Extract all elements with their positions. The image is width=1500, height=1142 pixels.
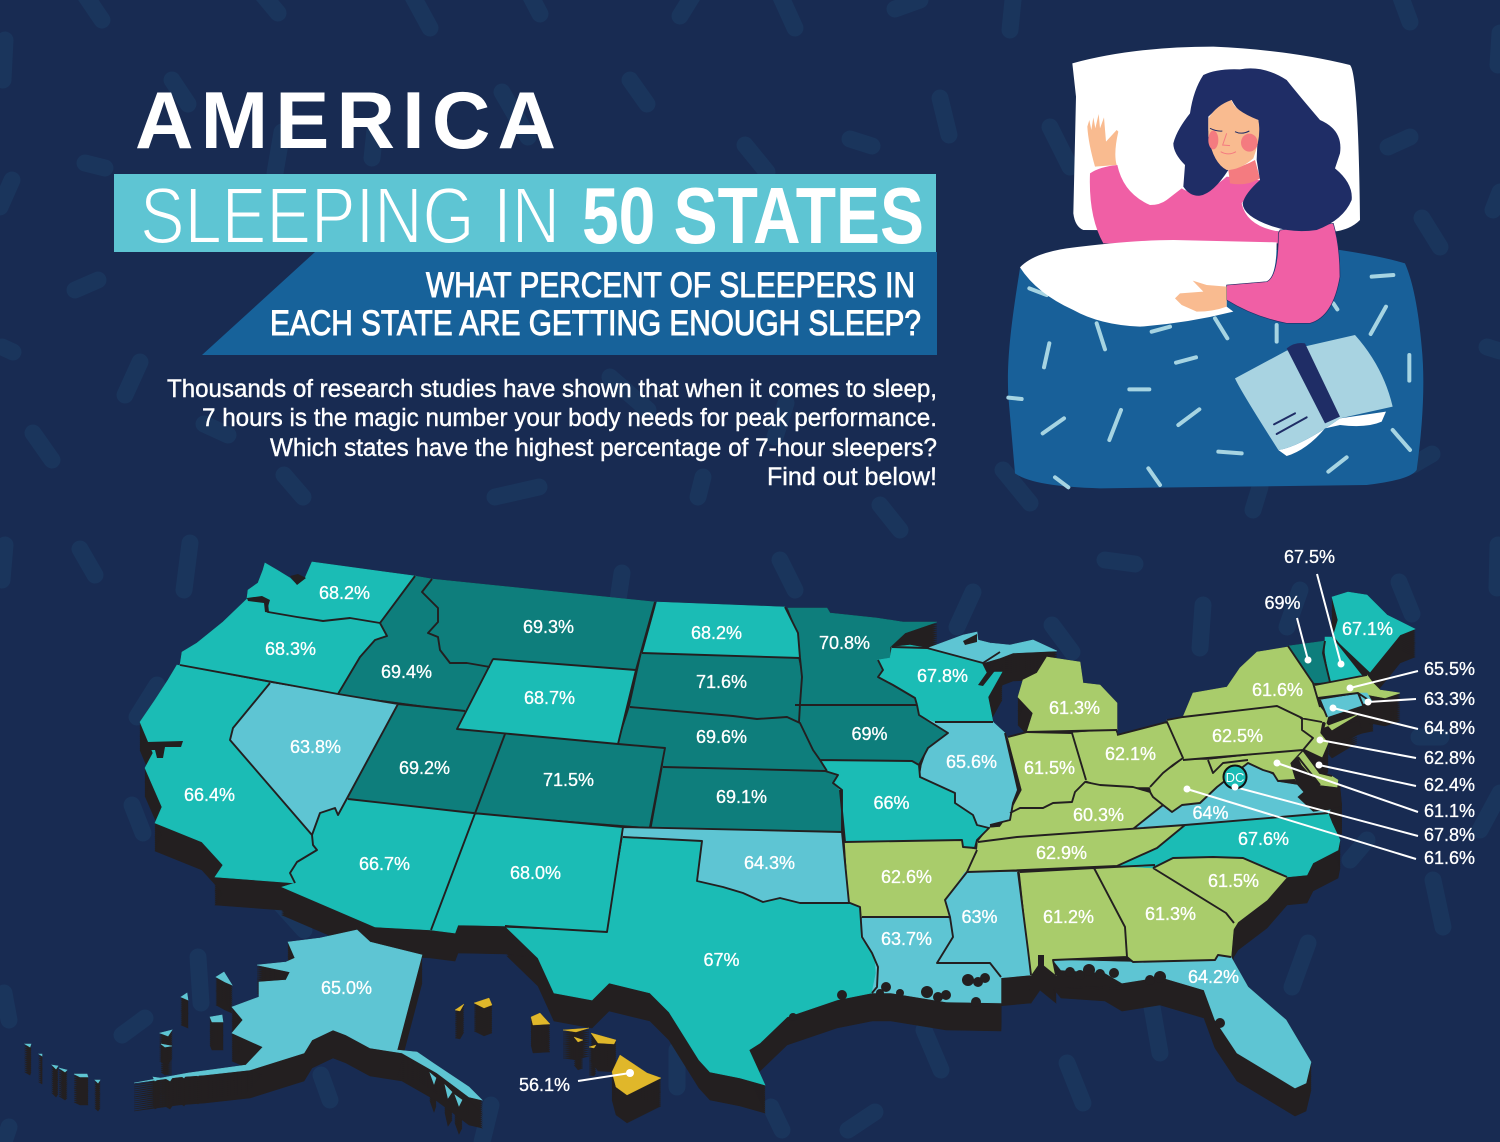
state: Ohio xyxy=(1072,722,1183,787)
blanket xyxy=(1008,250,1423,488)
state percentage labels: 61.3% xyxy=(1145,904,1196,924)
question line 2: EACH STATE ARE GETTING ENOUGH SLEEP? xyxy=(270,304,921,343)
state percentage labels: 62.5% xyxy=(1212,726,1263,746)
state: Idaho xyxy=(338,576,490,711)
state percentage labels: 61.3% xyxy=(1049,698,1100,718)
callout labels: 69% xyxy=(1264,593,1301,613)
state: Louisiana xyxy=(861,917,1001,1003)
state: North Dakota xyxy=(643,602,800,658)
state percentage labels xyxy=(184,583,1393,998)
book xyxy=(1235,335,1393,456)
state: Nebraska xyxy=(618,707,827,771)
state percentage labels: 69.3% xyxy=(523,617,574,637)
state percentage labels: 63.7% xyxy=(881,929,932,949)
state percentage labels: 67.6% xyxy=(1238,829,1289,849)
state percentage labels: 62.9% xyxy=(1036,843,1087,863)
banner: Sleeping in 50 states xyxy=(114,171,936,260)
neck xyxy=(1228,160,1260,184)
state percentage labels: 71.5% xyxy=(543,770,594,790)
state: South Carolina xyxy=(1153,857,1287,930)
state percentage labels: 68.7% xyxy=(524,688,575,708)
leader dots xyxy=(626,656,1372,1077)
state percentage labels: 61.6% xyxy=(1252,680,1303,700)
state: Massachusetts xyxy=(1315,675,1400,698)
intro text: Find out below! xyxy=(767,463,937,491)
state: Michigan lower peninsula xyxy=(1018,657,1117,732)
state percentage labels: 66.4% xyxy=(184,785,235,805)
state: Tennessee xyxy=(967,825,1185,872)
state percentage labels: 67.8% xyxy=(917,666,968,686)
callout labels: 61.1% xyxy=(1424,801,1475,821)
state: Utah xyxy=(348,704,505,813)
state borders xyxy=(180,576,1373,993)
callout labels: 67.5% xyxy=(1284,547,1335,567)
Chesapeake bay dark area xyxy=(1288,752,1342,812)
state percentage labels: 62.6% xyxy=(881,867,932,887)
state: Kentucky xyxy=(978,782,1163,842)
callout labels: 62.4% xyxy=(1424,775,1475,795)
state: Rhode Island xyxy=(1360,693,1373,705)
state percentage labels: 60.3% xyxy=(1073,805,1124,825)
state percentage labels: 69.2% xyxy=(399,758,450,778)
state: Missouri xyxy=(822,761,989,848)
state percentage labels: 63.8% xyxy=(290,737,341,757)
state: Kansas xyxy=(652,767,842,832)
state: Oklahoma xyxy=(623,827,849,903)
state: Minnesota xyxy=(788,608,937,705)
state: Maine xyxy=(1332,592,1415,672)
state percentage labels: 68.0% xyxy=(510,863,561,883)
callout labels: 56.1% xyxy=(519,1075,570,1095)
DC marker: DC xyxy=(1226,770,1244,785)
state: Arkansas xyxy=(845,840,977,917)
state: Connecticut xyxy=(1320,694,1363,717)
state percentage labels: 68.2% xyxy=(319,583,370,603)
state: West Virginia xyxy=(1150,760,1248,812)
lower hand xyxy=(1175,281,1227,312)
state: Iowa xyxy=(795,705,948,765)
state shapes with extruded shadow xyxy=(25,562,1415,1106)
state percentage labels: 61.5% xyxy=(1208,871,1259,891)
state: Montana xyxy=(422,579,655,670)
panel: question xyxy=(202,252,937,355)
state percentage labels: 71.6% xyxy=(696,672,747,692)
title: AMERICA: AMERICA xyxy=(135,76,556,166)
state: New Mexico xyxy=(431,813,623,933)
state: Arizona xyxy=(282,799,473,930)
state: New Hampshire xyxy=(1325,637,1363,682)
state percentage labels: 65.0% xyxy=(321,978,372,998)
state: Virginia xyxy=(1133,763,1330,829)
state: Oregon xyxy=(180,599,387,694)
state percentage labels: 64% xyxy=(1192,803,1229,823)
state percentage labels: 61.5% xyxy=(1024,758,1075,778)
question line 1: WHAT PERCENT OF SLEEPERS IN xyxy=(426,266,915,305)
heading: 50 states: 50 STATES xyxy=(582,171,924,260)
hair xyxy=(1173,68,1352,231)
state percentage labels: 68.2% xyxy=(691,623,742,643)
state: Wyoming xyxy=(457,659,636,744)
callout labels: 67.8% xyxy=(1424,825,1475,845)
state: Alaska xyxy=(25,930,482,1106)
sleeve xyxy=(1227,223,1340,323)
callout labels: 62.8% xyxy=(1424,748,1475,768)
closed eyes and mouth xyxy=(1210,128,1249,154)
illustration: woman sleeping xyxy=(1008,47,1423,488)
state: Florida xyxy=(1053,955,1311,1088)
state: North Carolina xyxy=(1117,813,1340,877)
map: United States xyxy=(25,562,1415,1106)
DC marker xyxy=(1224,766,1246,788)
intro text: 7 hours is the magic number your body needs for peak performance. xyxy=(202,404,937,432)
state percentage labels: 70.8% xyxy=(819,633,870,653)
pillow xyxy=(1072,47,1360,232)
state percentage labels: 65.6% xyxy=(946,752,997,772)
blanket pattern xyxy=(1008,275,1410,487)
callout labels: 63.3% xyxy=(1424,689,1475,709)
intro text: Which states have the highest percentage of 7-hour sleepers? xyxy=(270,434,937,462)
callout labels: 65.5% xyxy=(1424,659,1475,679)
leader lines xyxy=(578,574,1418,1081)
state percentage labels: 61.2% xyxy=(1043,907,1094,927)
state: Alabama xyxy=(1020,868,1127,975)
state: Colorado xyxy=(473,734,665,827)
state percentage labels: 64.3% xyxy=(744,853,795,873)
state percentage labels: 69.1% xyxy=(716,787,767,807)
state percentage labels: 67.1% xyxy=(1342,619,1393,639)
state percentage labels: 66% xyxy=(873,793,910,813)
state: Maryland xyxy=(1208,750,1302,781)
state percentage labels: 64.2% xyxy=(1188,967,1239,987)
face xyxy=(1208,100,1259,170)
state: California xyxy=(140,665,317,883)
state percentage labels: 69.4% xyxy=(381,662,432,682)
state: Wisconsin xyxy=(878,645,1002,722)
sweater xyxy=(1090,165,1280,243)
state: Texas xyxy=(507,837,878,1085)
state: New York xyxy=(1183,647,1357,730)
state percentage labels: 67% xyxy=(703,950,740,970)
state: Pennsylvania xyxy=(1167,706,1313,760)
state: Hawaii xyxy=(455,998,661,1095)
state: Indiana xyxy=(1008,732,1086,813)
state: Georgia xyxy=(1094,865,1234,962)
state: Vermont xyxy=(1288,641,1330,683)
state: Mississippi xyxy=(938,872,1031,978)
callout labels: 64.8% xyxy=(1424,718,1475,738)
raised hand xyxy=(1087,114,1118,167)
state percentage labels: 63% xyxy=(961,907,998,927)
intro text xyxy=(167,375,937,491)
state percentage labels: 62.1% xyxy=(1105,744,1156,764)
intro text: Thousands of research studies have shown that when it comes to sleep, xyxy=(167,375,937,403)
state: Washington xyxy=(247,562,415,623)
state: Delaware and eastern shore xyxy=(1298,752,1338,787)
state percentage labels: 68.3% xyxy=(265,639,316,659)
state: South Dakota xyxy=(630,653,802,722)
state percentage labels: 66.7% xyxy=(359,854,410,874)
callout labels xyxy=(519,547,1475,1095)
callouts: small northeastern states xyxy=(519,547,1475,1095)
heading: sleeping in: SLEEPING IN xyxy=(140,171,560,260)
state: Michigan upper peninsula xyxy=(928,632,1057,663)
state: Illinois xyxy=(919,715,1018,828)
state percentage labels: 69% xyxy=(851,724,888,744)
state percentage labels: 69.6% xyxy=(696,727,747,747)
coastal islands, bays and inlets xyxy=(147,574,1225,1028)
state: New Jersey xyxy=(1300,718,1328,757)
state: Nevada xyxy=(230,683,398,835)
callout labels: 61.6% xyxy=(1424,848,1475,868)
cheeks xyxy=(1208,131,1258,152)
hugged pillow xyxy=(1020,240,1277,327)
